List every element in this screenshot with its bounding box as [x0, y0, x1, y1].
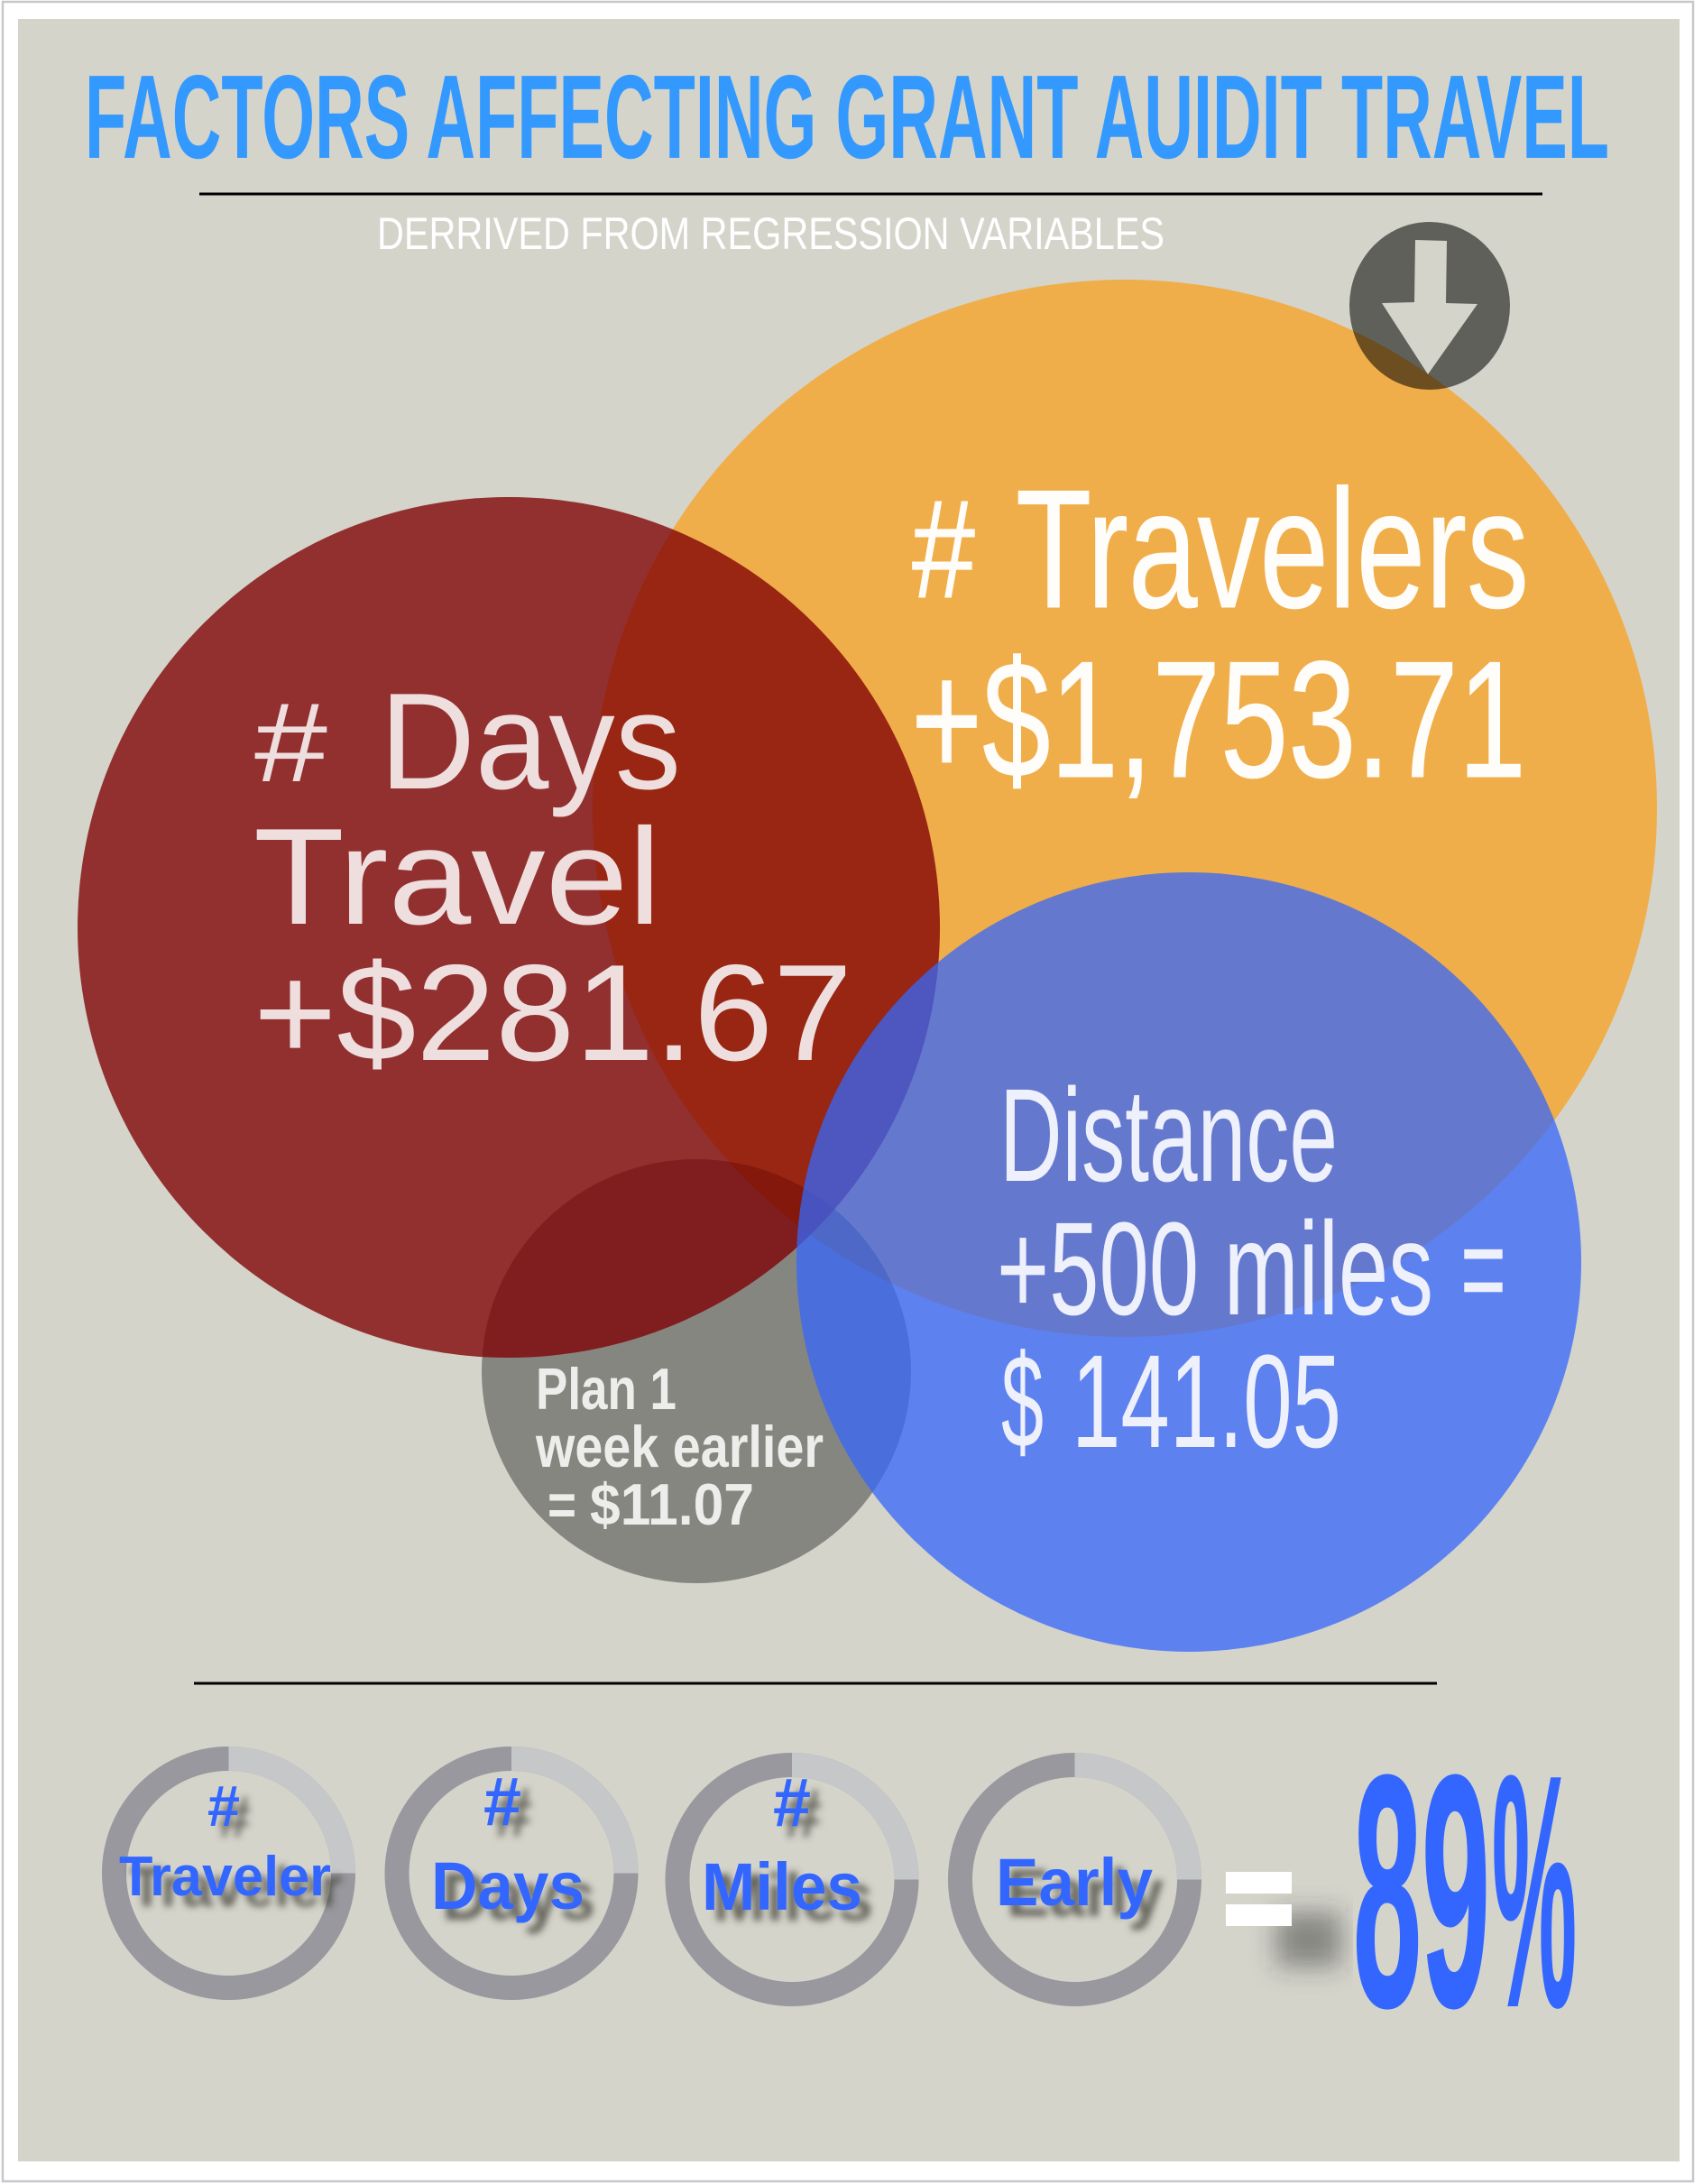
bubble: travelers — [593, 280, 1657, 1337]
equals shadow — [1276, 1912, 1341, 1967]
ring labels: Days — [431, 1848, 585, 1923]
equals sign — [1226, 1872, 1292, 1926]
ring labels: Early — [996, 1845, 1153, 1920]
bubble: days of travel — [78, 497, 940, 1358]
label: distance: 141.05 — [1072, 1328, 1341, 1476]
ring labels: Miles — [702, 1849, 862, 1924]
label: early planning: week earlier — [535, 1414, 824, 1479]
label: travelers: # — [912, 471, 975, 627]
label: days of travel: Travel — [253, 800, 661, 954]
ring: early — [960, 1765, 1189, 1994]
label: distance — [997, 1062, 1506, 1476]
label: travelers: Travelers — [1016, 455, 1529, 643]
bubble: distance — [796, 872, 1581, 1652]
title divider — [199, 193, 1542, 195]
label: distance: = — [1460, 1195, 1506, 1343]
label: early planning — [535, 1356, 824, 1537]
ring labels — [119, 1764, 1153, 1924]
ring: traveler — [114, 1759, 343, 1988]
label: early planning: = — [548, 1471, 576, 1537]
label: distance: +500 miles — [997, 1195, 1433, 1343]
label: days of travel: Days — [380, 665, 681, 818]
label: travelers — [911, 455, 1529, 812]
ring: days — [397, 1759, 626, 1988]
label: distance: $ — [1001, 1328, 1044, 1476]
subtitle: DERRIVED FROM REGRESSION VARIABLES — [377, 208, 1164, 259]
ring: miles — [677, 1765, 907, 1994]
label: early planning: Plan 1 — [536, 1356, 677, 1422]
label: days of travel — [253, 665, 852, 1090]
label: days of travel: +$281.67 — [253, 936, 852, 1090]
ring labels: # — [483, 1764, 521, 1840]
label: early planning: $11.07 — [590, 1471, 754, 1537]
label: distance: Distance — [999, 1062, 1338, 1210]
ring labels: Traveler — [119, 1846, 331, 1908]
ring labels: # — [773, 1765, 811, 1841]
label: days of travel: # — [254, 680, 327, 806]
bottom divider — [194, 1682, 1437, 1685]
bubble: early planning — [482, 1159, 911, 1583]
icon: down arrow — [1349, 222, 1510, 390]
ring labels: # — [207, 1774, 240, 1838]
result: 89 percent — [1353, 1707, 1577, 2076]
